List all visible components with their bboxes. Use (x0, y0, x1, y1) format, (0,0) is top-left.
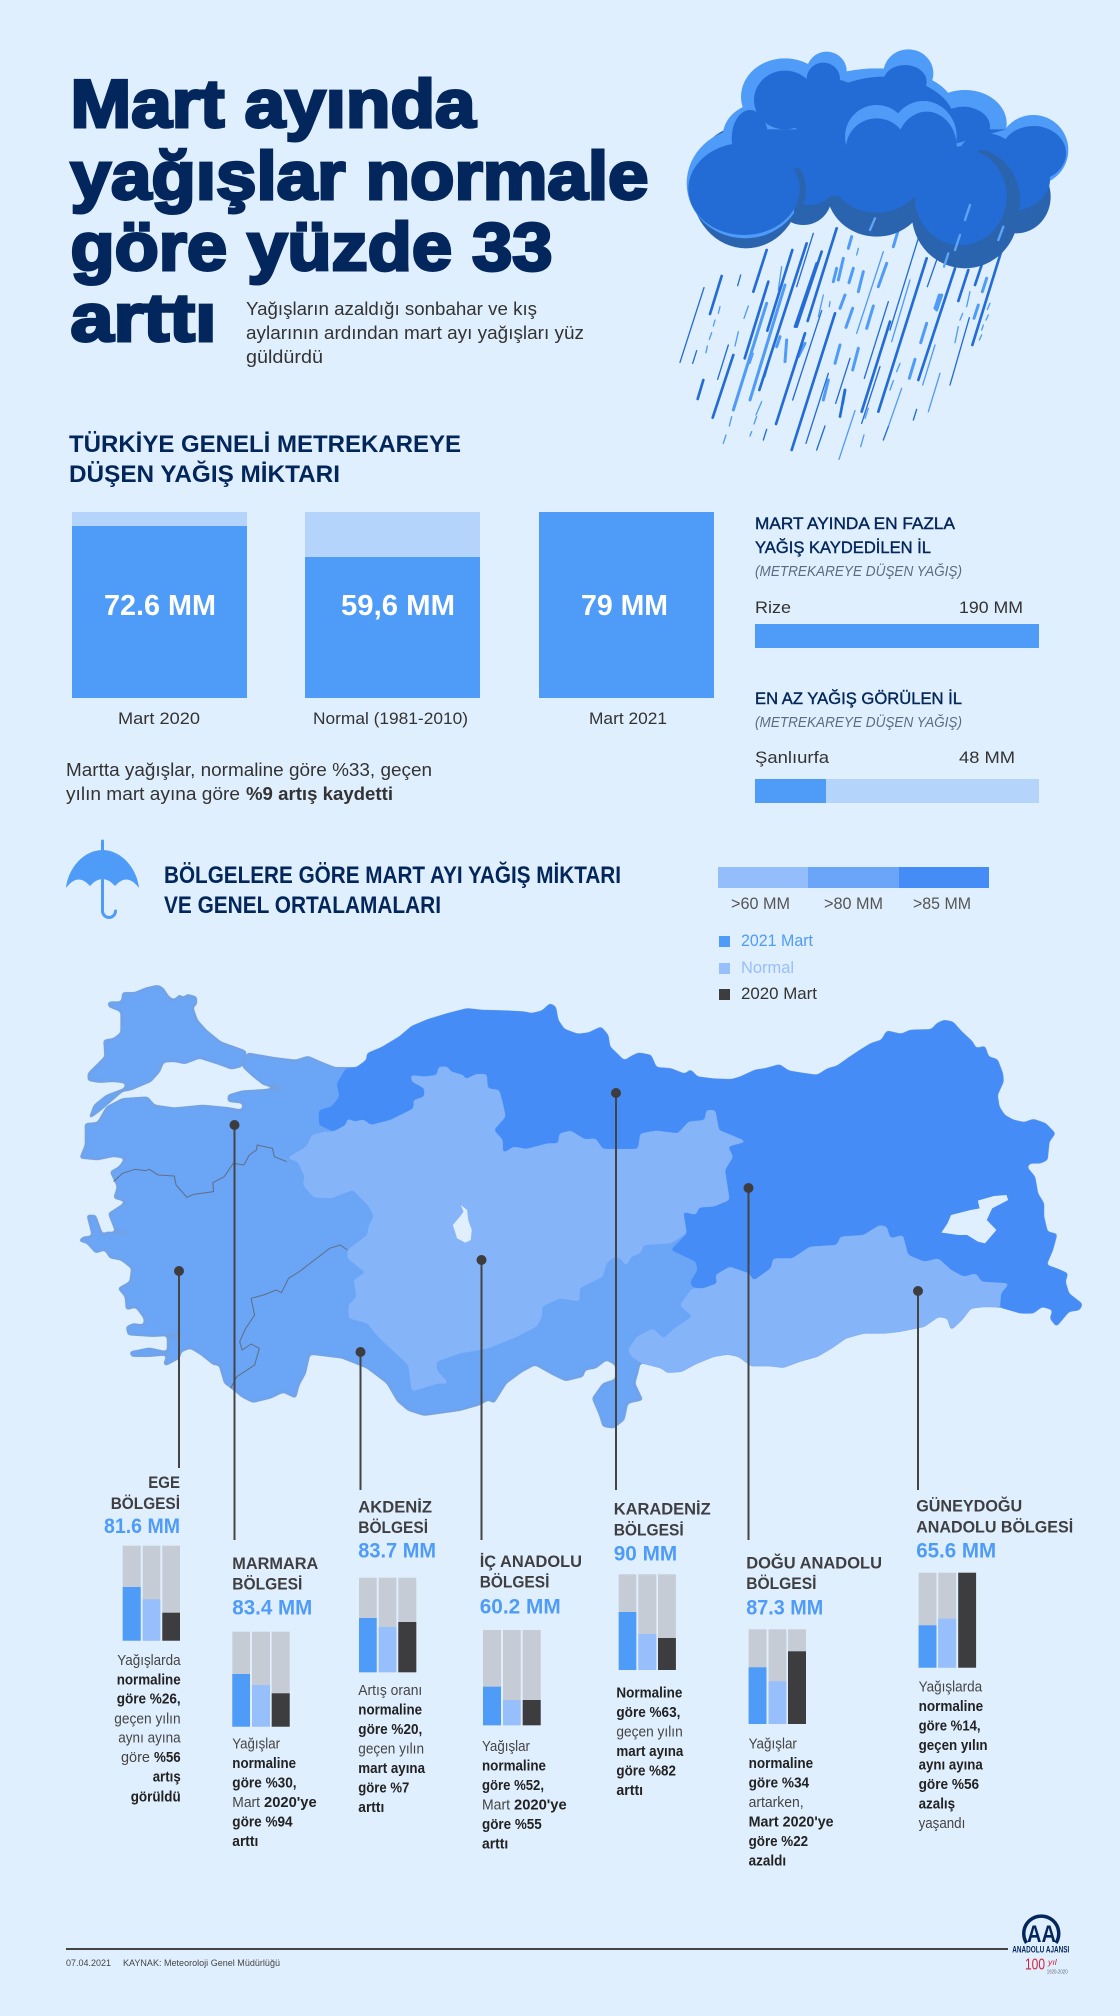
panel: Karadeniz: 90 MM (614, 1542, 677, 1565)
title: arttı (70, 280, 216, 356)
chart: Ic Anadolu bars (483, 1630, 541, 1725)
bar: Mart 2021: Mart 2021 (589, 709, 667, 728)
cloud shadow layer (691, 125, 1051, 268)
text: comparison note (66, 760, 432, 804)
panel: Akdeniz: Artış oranı (358, 1682, 422, 1699)
panel: Guneydogu Anadolu: 65.6 MM (916, 1540, 996, 1563)
footer: date and source: KAYNAK: Meteoroloji Genel Müdürlüğü (123, 1958, 280, 1969)
lake: Tuz (453, 1205, 472, 1243)
footer: date and source (66, 1949, 1008, 1969)
title: yağışlar normale (70, 138, 648, 214)
panel: Guneydogu Anadolu: ANADOLU BÖLGESİ (916, 1517, 1073, 1536)
cloud light rim layer (687, 49, 1068, 238)
panel: Akdeniz: normaline (358, 1702, 422, 1718)
region: Ic Anadolu (287, 1067, 747, 1392)
panel: Ege: Yağışlarda (117, 1652, 181, 1669)
panel: most rainfall province: (METREKAREYE DÜŞEN YAĞIŞ) (755, 562, 962, 580)
text: comparison note: Martta yağışlar, normaline göre %33, geçen (66, 760, 432, 780)
chart: Marmara bars (232, 1632, 290, 1727)
panel: Marmara (232, 1554, 318, 1850)
panel: Dogu Anadolu: normaline (749, 1755, 813, 1772)
panel: Karadeniz: arttı (616, 1782, 643, 1799)
panel: Marmara: Yağışlar (232, 1735, 280, 1752)
panel: Karadeniz: KARADENİZ (614, 1499, 711, 1518)
panel: Ic Anadolu: Mart (482, 1796, 511, 1814)
subtitle: Yağışların azaldığı sonbahar ve kış (246, 299, 537, 319)
panel: Ege: geçen yılın (114, 1710, 181, 1727)
logo: Anadolu Ajansi: 100 (1025, 1956, 1045, 1973)
panel: Akdeniz: AKDENİZ (358, 1497, 432, 1516)
cloud front lobes (845, 101, 1017, 195)
legend: series: Normal (741, 958, 794, 977)
panel: Karadeniz: mart ayına (616, 1743, 684, 1760)
heading: regional rainfall (164, 861, 621, 919)
heading: national rainfall: TÜRKİYE GENELİ METREKAREYE (69, 431, 461, 458)
panel: Dogu Anadolu: BÖLGESİ (746, 1574, 816, 1593)
panel: Dogu Anadolu: göre %34 (749, 1774, 810, 1791)
legend: rainfall scale: >80 MM (824, 894, 883, 913)
panel: Dogu Anadolu: 87.3 MM (746, 1596, 823, 1619)
panel: least rainfall province: EN AZ YAĞIŞ GÖRÜLEN İL (755, 689, 962, 708)
panel: Marmara: arttı (232, 1833, 258, 1850)
icon: storm cloud (687, 49, 1068, 268)
subtitle: güldürdü (246, 347, 323, 367)
bar: Mart 2020: Mart 2020 (118, 709, 200, 728)
panel: Marmara: MARMARA (232, 1554, 318, 1573)
panel: Akdeniz: arttı (358, 1799, 384, 1816)
panel: Marmara: BÖLGESİ (232, 1575, 302, 1594)
cloud crescents (794, 168, 806, 213)
panel: Marmara: Mart (232, 1794, 261, 1811)
panel: Ege: aynı ayına (118, 1730, 181, 1747)
logo: Anadolu Ajansi: 1920-2020 (1047, 1969, 1068, 1975)
panel: Ege: normaline (117, 1671, 181, 1688)
panel: Ic Anadolu: 60.2 MM (480, 1595, 561, 1618)
panel: most rainfall province: Rize (755, 598, 791, 617)
heading: national rainfall (69, 431, 461, 488)
panel: Ege: göre %26, (117, 1691, 181, 1708)
panel: Marmara: 2020'ye (264, 1794, 317, 1811)
panel: Dogu Anadolu: artarken, (749, 1794, 804, 1811)
panel: Ege: görüldü (131, 1788, 181, 1805)
heading: regional rainfall: VE GENEL ORTALAMALARI (164, 892, 441, 919)
panel: Ic Anadolu: normaline (482, 1758, 546, 1774)
panel: Ic Anadolu: İÇ ANADOLU (480, 1552, 582, 1571)
panel: Karadeniz: göre %63, (616, 1704, 680, 1721)
panel: Guneydogu Anadolu: normaline (919, 1698, 983, 1715)
pointer: Guneydogu (913, 1286, 923, 1490)
panel: Dogu Anadolu: DOĞU ANADOLU (746, 1553, 882, 1572)
panel: most rainfall province: YAĞIŞ KAYDEDİLEN İL (755, 538, 931, 557)
panel: Marmara: göre %94 (232, 1813, 293, 1830)
heading: national rainfall: DÜŞEN YAĞIŞ MİKTARI (69, 460, 340, 488)
panel: Dogu Anadolu: göre %22 (749, 1833, 808, 1850)
chart: Ege bars (123, 1546, 180, 1641)
region: Karadeniz and Dogu Anadolu (319, 1003, 1082, 1327)
panel: least rainfall province: Şanlıurfa (755, 748, 830, 767)
panel: Ic Anadolu: göre %55 (482, 1816, 542, 1833)
panel: least rainfall province: (METREKAREYE DÜŞEN YAĞIŞ) (755, 713, 962, 731)
lake: Van (941, 1195, 1008, 1243)
panel: Akdeniz: geçen yılın (358, 1740, 424, 1758)
legend: series: 2021 Mart (741, 931, 813, 950)
panel: Dogu Anadolu (746, 1553, 882, 1869)
pointer: Marmara (230, 1120, 240, 1540)
panel: Akdeniz (358, 1497, 436, 1816)
legend: rainfall scale: >60 MM (731, 894, 790, 913)
bar: Normal 1981-2010: 59,6 MM (341, 590, 455, 622)
text: comparison note: %9 artış kaydetti (246, 784, 393, 804)
icon: umbrella (66, 841, 139, 918)
panel: Ic Anadolu: Yağışlar (482, 1738, 530, 1755)
panel: Guneydogu Anadolu: aynı ayına (919, 1757, 983, 1774)
panel: Ic Anadolu: 2020'ye (514, 1796, 567, 1814)
text: comparison note: yılın mart ayına göre (66, 784, 240, 804)
panel: Ege: göre (121, 1749, 150, 1766)
bar: Mart 2021: 79 MM (581, 590, 668, 622)
region: Thrace (88, 985, 246, 1119)
panel: Ic Anadolu (480, 1552, 582, 1852)
panel: Akdeniz: göre %20, (358, 1721, 422, 1738)
legend: rainfall scale: >85 MM (913, 894, 971, 913)
panel: Ege: artış (153, 1769, 181, 1786)
title (70, 66, 648, 356)
bar: Normal 1981-2010 (305, 512, 480, 728)
legend: series (719, 931, 817, 1003)
panel: most rainfall province: MART AYINDA EN FAZLA (755, 514, 956, 533)
border: Ege and Akdeniz (231, 1245, 347, 1388)
chart: Guneydogu bars (919, 1573, 976, 1668)
panel: Guneydogu Anadolu (916, 1497, 1073, 1832)
title: Mart ayında (70, 66, 477, 142)
panel: Ege: 81.6 MM (104, 1515, 180, 1538)
heading: regional rainfall: BÖLGELERE GÖRE MART AYI YAĞIŞ MİKTARI (164, 861, 621, 889)
logo: Anadolu Ajansi: ANADOLU AJANSI (1012, 1945, 1069, 1955)
panel: Ege (104, 1473, 181, 1805)
panel: Karadeniz: geçen yılın (616, 1724, 683, 1741)
panel: most rainfall province: 190 MM (959, 598, 1023, 617)
panel: Guneydogu Anadolu: yaşandı (919, 1815, 965, 1832)
logo: Anadolu Ajansi (1012, 1916, 1069, 1975)
cloud main body (732, 63, 1066, 213)
pointer: Dogu Anadolu (744, 1183, 754, 1540)
logo: Anadolu Ajansi: yıl (1047, 1958, 1057, 1967)
bar: Normal 1981-2010: Normal (1981-2010) (313, 709, 468, 728)
panel: Ege: BÖLGESİ (111, 1494, 180, 1513)
subtitle: aylarının ardından mart ayı yağışları yüz (246, 323, 584, 343)
panel: Akdeniz: göre %7 (358, 1780, 409, 1796)
panel: Akdeniz: 83.7 MM (358, 1540, 436, 1563)
panel: Ege: %56 (154, 1749, 181, 1766)
panel: Guneydogu Anadolu: geçen yılın (919, 1737, 988, 1754)
panel: Akdeniz: mart ayına (358, 1760, 426, 1777)
chart: Dogu Anadolu bars (749, 1629, 806, 1724)
panel: Karadeniz: göre %82 (616, 1763, 676, 1780)
region: Guneydogu Anadolu (628, 1225, 1009, 1373)
logo: Anadolu Ajansi: AA (1027, 1921, 1056, 1948)
subtitle (246, 299, 584, 367)
legend: rainfall scale (718, 867, 989, 913)
panel: least rainfall province (755, 689, 1039, 803)
panel: Akdeniz: BÖLGESİ (358, 1518, 428, 1537)
panel: Ic Anadolu: arttı (482, 1836, 508, 1852)
rain streaks over cloud (870, 205, 1003, 267)
panel: Ege: EGE (148, 1473, 180, 1492)
panel: Dogu Anadolu: Mart 2020'ye (749, 1813, 834, 1830)
map of Turkey (79, 985, 1082, 1428)
region: Anatolia base (Marmara, Ege, Akdeniz) (79, 1003, 1082, 1428)
pointer: Karadeniz (611, 1088, 621, 1490)
border: Ege and Marmara (114, 1145, 287, 1197)
bar: Mart 2020: 72.6 MM (104, 590, 216, 622)
panel: Guneydogu Anadolu: Yağışlarda (919, 1679, 983, 1696)
panel: Marmara: normaline (232, 1755, 296, 1772)
panel: Karadeniz: Normaline (616, 1685, 682, 1702)
panel: Guneydogu Anadolu: GÜNEYDOĞU (916, 1497, 1022, 1516)
icon: rain (680, 228, 1002, 459)
panel: Ic Anadolu: göre %52, (482, 1777, 544, 1794)
bar: Mart 2021 (539, 512, 714, 728)
panel: Dogu Anadolu: Yağışlar (749, 1735, 797, 1752)
panel: Guneydogu Anadolu: göre %14, (919, 1718, 981, 1735)
panel: Marmara: 83.4 MM (232, 1596, 312, 1619)
chart: Akdeniz bars (359, 1578, 416, 1672)
panel: Guneydogu Anadolu: azalış (919, 1796, 955, 1813)
title: göre yüzde 33 (70, 209, 552, 285)
chart: Karadeniz bars (619, 1574, 676, 1670)
footer: date and source: 07.04.2021 (66, 1958, 111, 1969)
bar: Mart 2020 (72, 512, 247, 728)
panel: Karadeniz: BÖLGESİ (614, 1521, 684, 1540)
panel: Dogu Anadolu: azaldı (749, 1852, 786, 1869)
panel: Marmara: göre %30, (232, 1774, 297, 1791)
pointer: Akdeniz (356, 1347, 366, 1490)
panel: least rainfall province: 48 MM (959, 748, 1015, 767)
panel: Guneydogu Anadolu: göre %56 (919, 1776, 979, 1793)
panel: most rainfall province (755, 514, 1039, 648)
pointer: Ic Anadolu (476, 1255, 486, 1540)
panel: Karadeniz (614, 1499, 711, 1799)
panel: Ic Anadolu: BÖLGESİ (480, 1573, 549, 1592)
legend: series: 2020 Mart (741, 984, 817, 1003)
pointer: Ege (174, 1266, 184, 1468)
